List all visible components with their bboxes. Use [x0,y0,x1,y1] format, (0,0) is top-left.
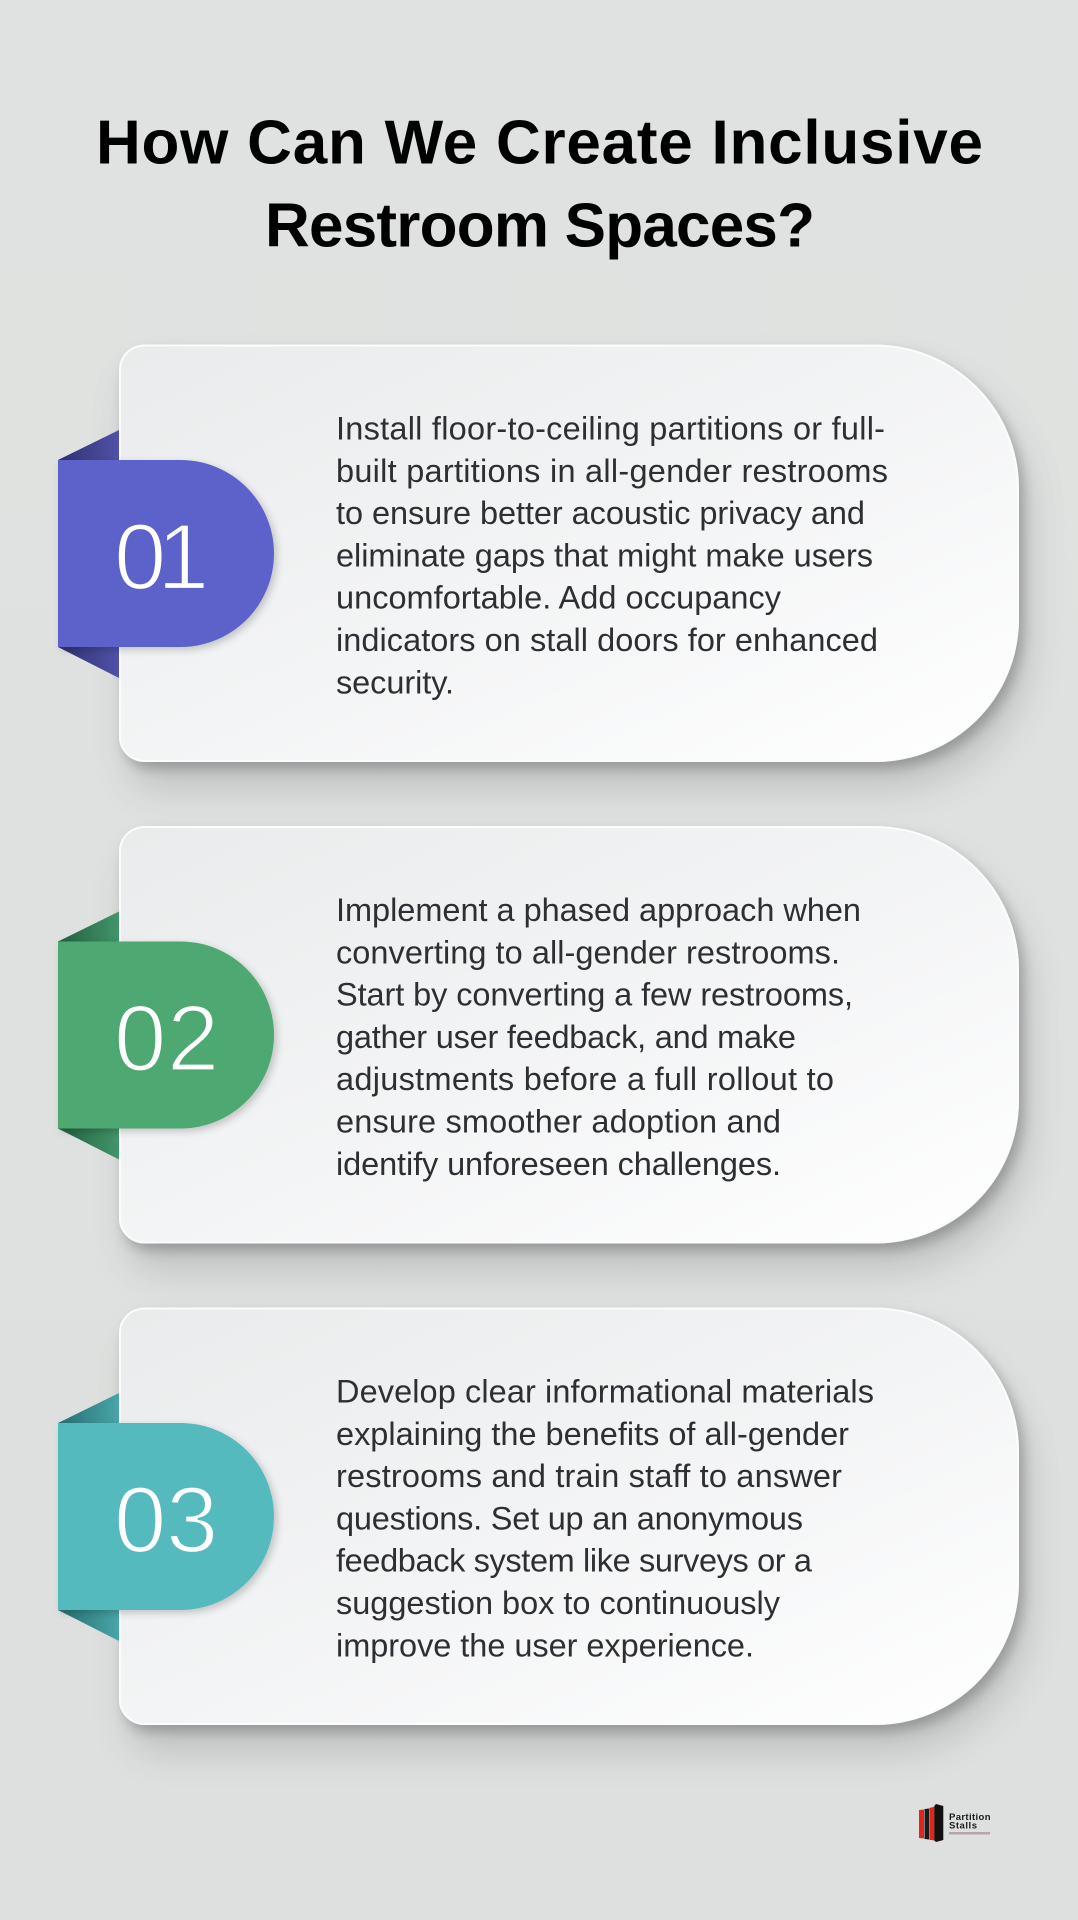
step number: 03 [114,1467,218,1572]
logo wordmark: Stalls [949,1820,977,1832]
step text: gather user feedback, and make [336,1019,796,1055]
number badge [58,1423,274,1610]
step text: explaining the benefits of all-gender [336,1416,849,1452]
title [96,108,983,260]
panel: step 3 [58,1308,1018,1724]
card background [120,346,1018,761]
step text: eliminate gaps that might make users [336,537,873,573]
step text: questions. Set up an anonymous [336,1500,803,1536]
step text: uncomfortable. Add occupancy [336,580,782,616]
step text: Implement a phased approach when [336,892,861,928]
step text: Start by converting a few restrooms, [336,977,853,1013]
step text: Develop clear informational materials [336,1374,874,1410]
logo wordmark: Partition [949,1812,991,1823]
step text: restrooms and train staff to answer [336,1458,842,1494]
step text: ensure smoother adoption and [336,1104,781,1140]
step text: converting to all-gender restrooms. [336,934,840,970]
step text: suggestion box to continuously [336,1585,781,1621]
number badge [58,942,274,1128]
logo icon: stall bars [919,1804,943,1842]
step text: indicators on stall doors for enhanced [336,622,878,658]
step number: 02 [114,986,219,1090]
card background [120,827,1018,1242]
step text [336,892,861,1182]
step text [336,410,888,700]
ribbon fold top [58,912,119,942]
number badge [58,460,274,647]
step text: identify unforeseen challenges. [336,1146,781,1182]
step text: Install floor-to-ceiling partitions or full- [336,410,885,446]
logo wordmark [949,1812,991,1832]
ribbon fold top [58,430,119,460]
logo tagline strip [949,1832,990,1834]
step text: security. [336,664,454,700]
panel: step 2 [58,827,1018,1242]
title: Restroom Spaces? [265,192,815,260]
step text: improve the user experience. [336,1627,754,1663]
panel: step 1 [58,346,1018,761]
ribbon fold bottom [58,1610,119,1641]
ribbon fold top [58,1393,119,1423]
step text: to ensure better acoustic privacy and [336,495,865,531]
title: How Can We Create Inclusive [96,108,983,178]
ribbon fold bottom [58,647,119,678]
step text: adjustments before a full rollout to [336,1061,834,1097]
ribbon fold bottom [58,1128,119,1160]
step text [336,1374,874,1663]
step text: built partitions in all-gender restrooms [336,453,888,489]
step number: 01 [114,504,209,609]
step text: feedback system like surveys or a [336,1543,813,1579]
logo: Partition Stalls [919,1804,991,1842]
card background [120,1308,1018,1724]
